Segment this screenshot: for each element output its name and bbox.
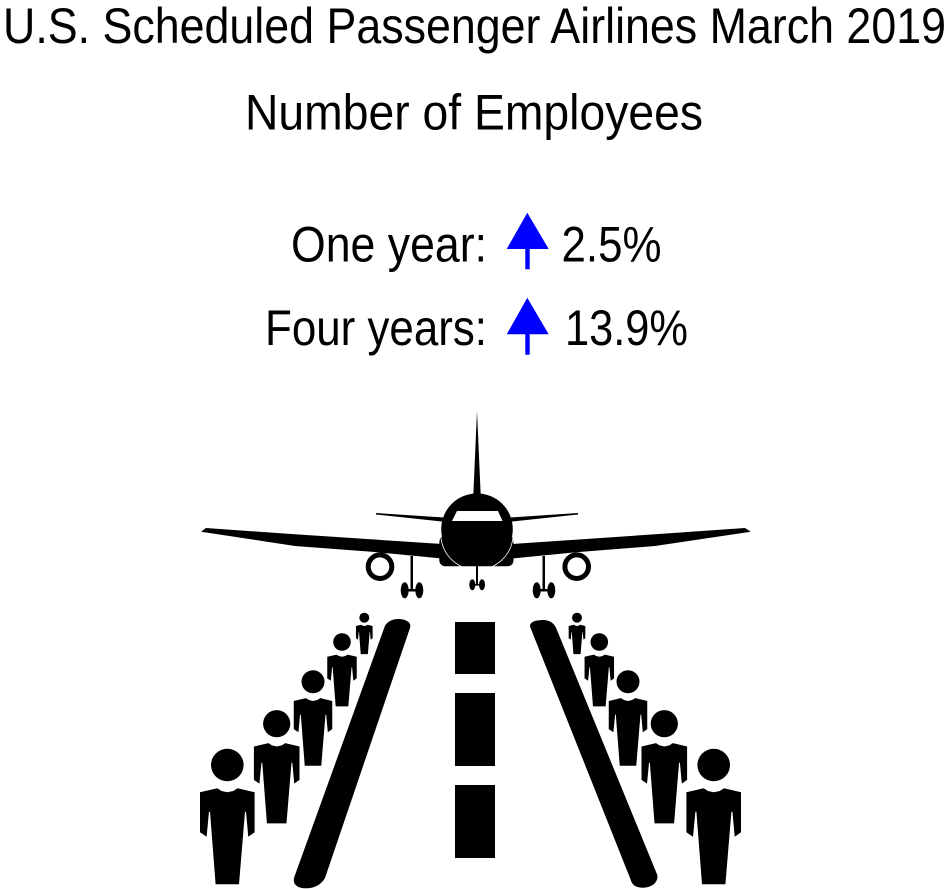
horizontal stabilizers: [376, 513, 578, 522]
stat row: one year: [291, 213, 662, 272]
icon: blue up arrow, one year: [507, 213, 549, 269]
label: four years: Four years:: [265, 300, 487, 356]
fuselage highlight: [441, 537, 513, 570]
employees: left line: [200, 613, 373, 884]
employees: right line: [569, 613, 741, 884]
left landing gear: [405, 556, 419, 592]
belly fairing: [439, 537, 514, 566]
subtitle: Number of Employees: [245, 84, 703, 140]
label: one year: One year:: [291, 216, 487, 272]
wings: [201, 528, 751, 558]
nose gear: [472, 565, 482, 586]
value: four year change: 13.9%: [565, 300, 688, 356]
tail fin: [473, 411, 481, 502]
runway centre stripes: [455, 622, 495, 858]
icon: airplane front view: [201, 411, 751, 598]
right landing gear: [537, 556, 551, 592]
engines: [368, 555, 392, 578]
icon: blue up arrow, four years: [507, 298, 549, 355]
runway right edge: [530, 620, 657, 888]
value: one year change: 2.5%: [562, 216, 662, 272]
stat row: four years: [265, 298, 688, 356]
runway left edge: [294, 619, 410, 888]
fuselage: [441, 493, 513, 565]
windshield: [452, 511, 502, 521]
